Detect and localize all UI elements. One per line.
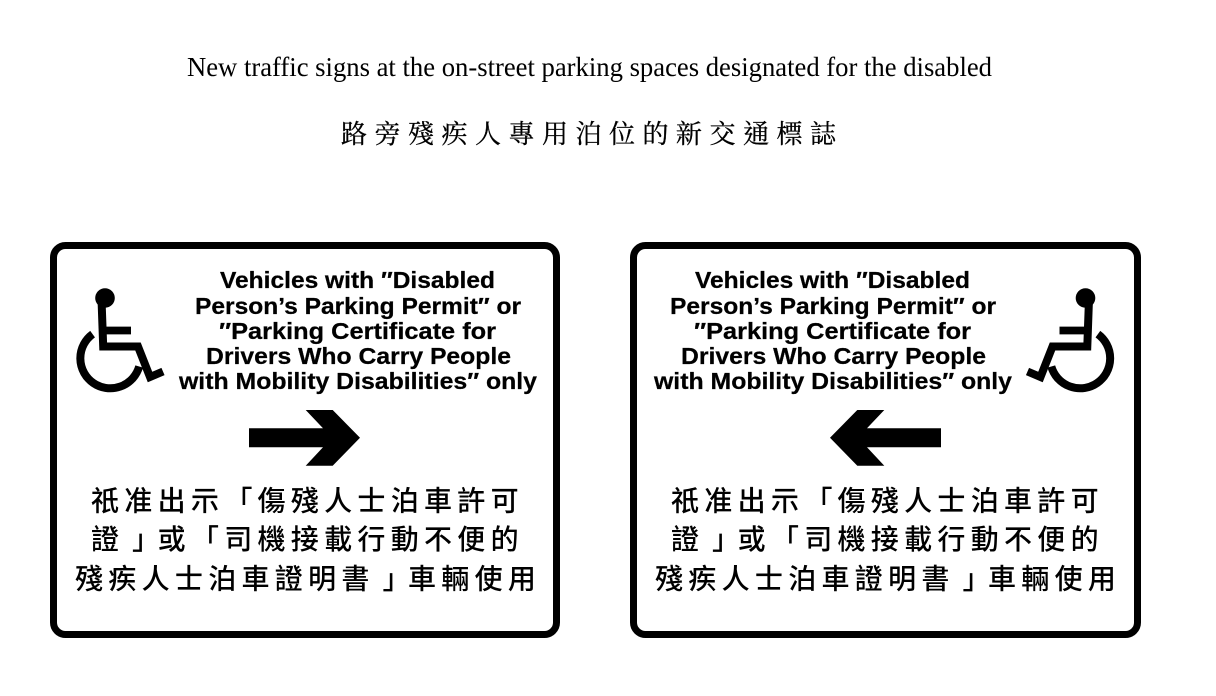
English permit text: Drivers Who Carry People xyxy=(206,343,511,369)
Chinese permit text xyxy=(655,486,1116,594)
English permit text: Person’s Parking Permit″ or xyxy=(670,293,996,319)
panel: right sign xyxy=(634,246,1138,634)
sign border xyxy=(54,246,556,634)
English permit text: with Mobility Disabilities″ only xyxy=(178,368,537,394)
Chinese permit text: 證」或「司機接載行動不便的 xyxy=(91,524,519,555)
arrow: pointing right xyxy=(249,410,360,466)
English permit text: Vehicles with ″Disabled xyxy=(220,267,495,293)
title: English heading: New traffic signs at the on-street parking spaces designated for the disabled xyxy=(187,51,992,82)
Chinese permit text xyxy=(75,486,536,594)
English permit text: Person’s Parking Permit″ or xyxy=(195,293,521,319)
panel: left sign xyxy=(54,246,556,634)
Chinese permit text: 殘疾人士泊車證明書」車輛使用 xyxy=(655,564,1116,594)
icon: wheelchair symbol facing right xyxy=(80,288,163,388)
English permit text: with Mobility Disabilities″ only xyxy=(653,368,1012,394)
English permit text xyxy=(653,267,1012,394)
Chinese permit text: 證」或「司機接載行動不便的 xyxy=(671,524,1099,555)
Chinese permit text: 祇准出示「傷殘人士泊車許可 xyxy=(671,486,1099,516)
icon: wheelchair symbol facing left xyxy=(1028,288,1110,388)
English permit text: Drivers Who Carry People xyxy=(681,343,986,369)
English permit text: Vehicles with ″Disabled xyxy=(695,267,970,293)
sign border xyxy=(634,246,1138,634)
Chinese permit text: 殘疾人士泊車證明書」車輛使用 xyxy=(75,564,536,594)
title: Chinese heading: 路旁殘疾人專用泊位的新交通標誌 xyxy=(341,120,837,149)
English permit text: ″Parking Certificate for xyxy=(694,318,971,344)
arrow: pointing left xyxy=(830,410,941,466)
Chinese permit text: 祇准出示「傷殘人士泊車許可 xyxy=(91,486,519,516)
English permit text xyxy=(178,267,537,394)
English permit text: ″Parking Certificate for xyxy=(219,318,496,344)
